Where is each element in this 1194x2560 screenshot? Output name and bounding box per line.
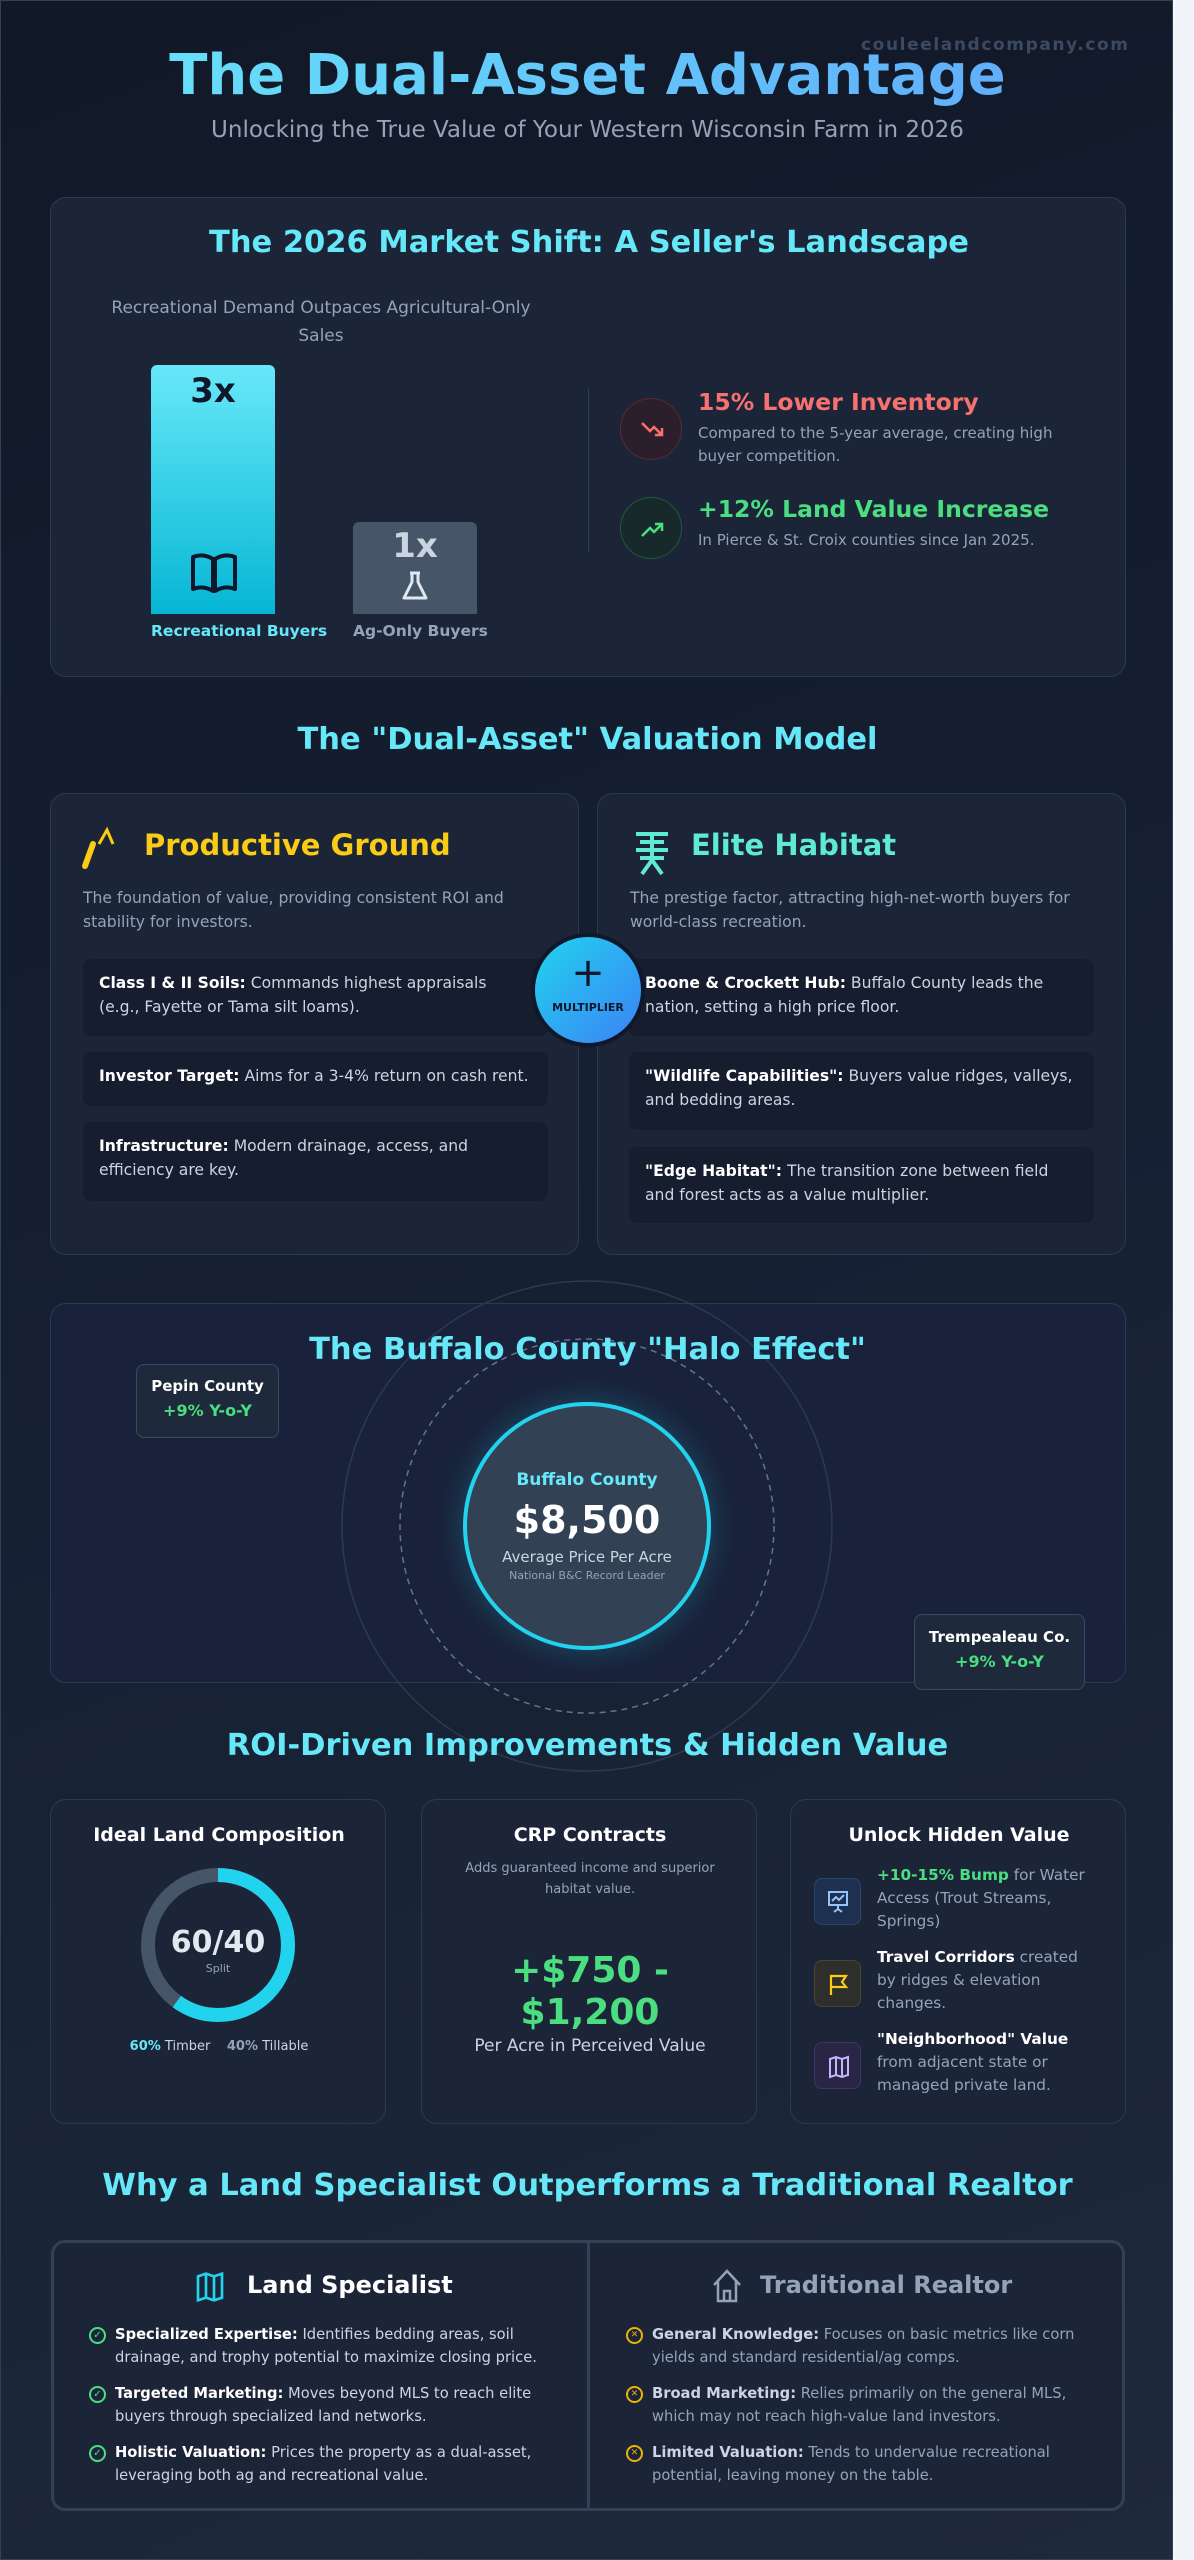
item: boone & crockett [629, 959, 1094, 1036]
panel: land composition [50, 1799, 386, 2124]
icon: trend down [620, 398, 682, 460]
stat: lower inventory [620, 388, 1052, 465]
bar: ag-only 1x: 1x [392, 526, 438, 566]
icon: map [814, 2042, 861, 2089]
panel: productive ground [50, 793, 579, 1255]
panel: elite habitat [597, 793, 1126, 1255]
item: investor target: Investor Target: Aims for a 3-4% return on cash rent. [99, 1067, 529, 1085]
stat: lower inventory: 15% Lower Inventory [698, 388, 979, 416]
list: realtor drawbacks: Limited Valuation: Tends to undervalue recreational potential, leaving money on the table. [652, 2444, 1050, 2484]
list: specialist benefits: ✓ [93, 2389, 102, 2400]
stat: land value increase: +12% Land Value Increase [698, 495, 1049, 523]
icon: multiplier badge [531, 933, 645, 1047]
list: realtor drawbacks [626, 2326, 1074, 2484]
callout: pepin county: +9% Y-o-Y [163, 1401, 252, 1420]
panel: hidden value [790, 1799, 1126, 2124]
callout: buffalo county: Buffalo County [516, 1470, 658, 1490]
heading: ROI improvements: ROI-Driven Improvements & Hidden Value [227, 1728, 948, 1763]
halo rings diagram [341, 1280, 833, 1772]
stat: lower inventory: Compared to the 5-year average, creating high buyer competition. [698, 424, 1052, 465]
stat: CRP value: +$750 - [511, 1950, 669, 1991]
legend: 60% Timber 40% Tillable [130, 2039, 308, 2054]
column: traditional realtor: Traditional Realtor [760, 2271, 1012, 2299]
icon: multiplier badge: MULTIPLIER [552, 1001, 624, 1014]
icon: multiplier badge: + [571, 950, 605, 996]
icon: map [196, 2272, 224, 2302]
item: edge habitat [629, 1147, 1094, 1223]
bar: recreational 3x: 3x [190, 371, 236, 411]
item: soils: Class I & II Soils: Commands highest appraisals (e.g., Fayette or Tama silt loams). [99, 974, 487, 1016]
subtitle: Unlocking the True Value of Your Western Wisconsin Farm in 2026 [211, 117, 964, 143]
item: soils [83, 959, 548, 1036]
callout: trempealeau: Trempealeau Co. [929, 1628, 1070, 1646]
item: edge habitat: "Edge Habitat": The transition zone between field and forest acts as a value multiplier. [645, 1162, 1048, 1204]
item: wildlife: "Wildlife Capabilities": Buyers value ridges, valleys, and bedding areas. [645, 1067, 1072, 1109]
item: investor target [83, 1052, 548, 1106]
callout: pepin county: Pepin County [151, 1377, 264, 1395]
callout: pepin county [136, 1364, 279, 1438]
description: The foundation of value, providing consistent ROI and stability for investors. [83, 889, 504, 931]
panel: hidden value: Unlock Hidden Value [848, 1824, 1070, 1846]
item: boone & crockett: Boone & Crockett Hub: Buffalo County leads the nation, setting a high price floor. [645, 974, 1043, 1016]
panel: CRP contracts [421, 1799, 757, 2124]
column: traditional realtor [626, 2269, 1074, 2484]
list: specialist benefits: ✓ [93, 2330, 102, 2341]
list: specialist benefits: Holistic Valuation: Prices the property as a dual-asset, leveraging both ag and recreational value. [115, 2444, 531, 2484]
description: The prestige factor, attracting high-net-worth buyers for world-class recreation. [630, 889, 1070, 931]
heading: productive ground: Productive Ground [144, 828, 451, 862]
icon: book [191, 553, 237, 593]
item: infrastructure: Infrastructure: Modern drainage, access, and efficiency are key. [99, 1137, 468, 1179]
list: specialist benefits: Specialized Expertise: Identifies bedding areas, soil drainage, and trophy potential to maximize closing price. [115, 2326, 537, 2366]
callout: trempealeau [914, 1614, 1085, 1690]
bar chart [151, 365, 488, 640]
bar labels: Recreational Buyers [151, 622, 327, 640]
heading: valuation model: The "Dual-Asset" Valuation Model [298, 722, 878, 757]
list: realtor drawbacks: Broad Marketing: Relies primarily on the general MLS, which may not reach high-value land investors. [652, 2385, 1066, 2425]
stat: CRP value: $1,200 [521, 1992, 659, 2033]
heading: halo effect: The Buffalo County "Halo Effect" [309, 1332, 866, 1367]
list: realtor drawbacks: General Knowledge: Focuses on basic metrics like corn yields and standard residential/ag comps. [652, 2326, 1074, 2366]
icon: flag [814, 1960, 861, 2007]
icon: house [713, 2269, 741, 2302]
callout: buffalo county: Average Price Per Acre [502, 1548, 672, 1566]
list: specialist benefits [89, 2326, 537, 2484]
title: The Dual-Asset Advantage [169, 43, 1006, 108]
callout: trempealeau: +9% Y-o-Y [955, 1652, 1044, 1671]
panel: CRP contracts: Per Acre in Perceived Value [474, 2036, 706, 2056]
stat: CRP value [511, 1950, 669, 2033]
stat: land value increase [620, 495, 1049, 559]
bar: ag-only 1x [353, 522, 477, 614]
panel: halo effect [50, 1303, 1126, 1683]
panel: hidden value: Travel Corridors created by ridges & elevation changes. [877, 1948, 1078, 2012]
list: realtor drawbacks: ✕ [631, 2448, 638, 2458]
icon: wheat [82, 826, 114, 869]
donut chart: Split [206, 1962, 231, 1975]
heading: elite habitat: Elite Habitat [691, 828, 896, 862]
panel: CRP contracts: CRP Contracts [514, 1824, 666, 1846]
panel: comparison [51, 2240, 1125, 2511]
column: land specialist [89, 2271, 537, 2484]
callout: buffalo county: National B&C Record Leader [509, 1569, 665, 1582]
bar: recreational 3x [151, 365, 275, 614]
callout: buffalo county [463, 1402, 711, 1650]
panel: hidden value: "Neighborhood" Value from adjacent state or managed private land. [877, 2030, 1068, 2094]
panel: land composition: Ideal Land Composition [93, 1824, 345, 1846]
heading: specialist vs realtor: Why a Land Specialist Outperforms a Traditional Realtor [102, 2168, 1073, 2203]
icon: trend up [620, 497, 682, 559]
chart caption: Recreational Demand Outpaces Agricultural-Only Sales [111, 298, 531, 346]
column: land specialist: Land Specialist [247, 2271, 453, 2299]
list: realtor drawbacks: ✕ [631, 2389, 638, 2399]
list: specialist benefits: ✓ [93, 2448, 102, 2459]
item: infrastructure [83, 1122, 548, 1201]
callout: buffalo county: $8,500 [514, 1498, 660, 1542]
list: specialist benefits: Targeted Marketing: Moves beyond MLS to reach elite buyers through specialized land networks. [115, 2385, 531, 2425]
donut chart: 60/40 [171, 1925, 265, 1960]
watermark: couleelandcompany.com [861, 35, 1130, 55]
item: wildlife [629, 1052, 1094, 1130]
panel: CRP contracts: Adds guaranteed income and superior habitat value. [465, 1861, 715, 1897]
icon: presentation [814, 1878, 861, 1925]
donut chart [141, 1868, 295, 2022]
heading: market shift: The 2026 Market Shift: A Seller's Landscape [209, 225, 969, 260]
icon: flask [402, 572, 428, 600]
panel: market shift [50, 197, 1126, 677]
bar chart: Ag-Only Buyers [353, 622, 488, 640]
stat: land value increase: In Pierce & St. Croix counties since Jan 2025. [698, 531, 1034, 549]
panel: hidden value: +10-15% Bump for Water Access (Trout Streams, Springs) [877, 1866, 1085, 1930]
icon: tree [636, 832, 668, 876]
list: realtor drawbacks: ✕ [631, 2330, 638, 2340]
